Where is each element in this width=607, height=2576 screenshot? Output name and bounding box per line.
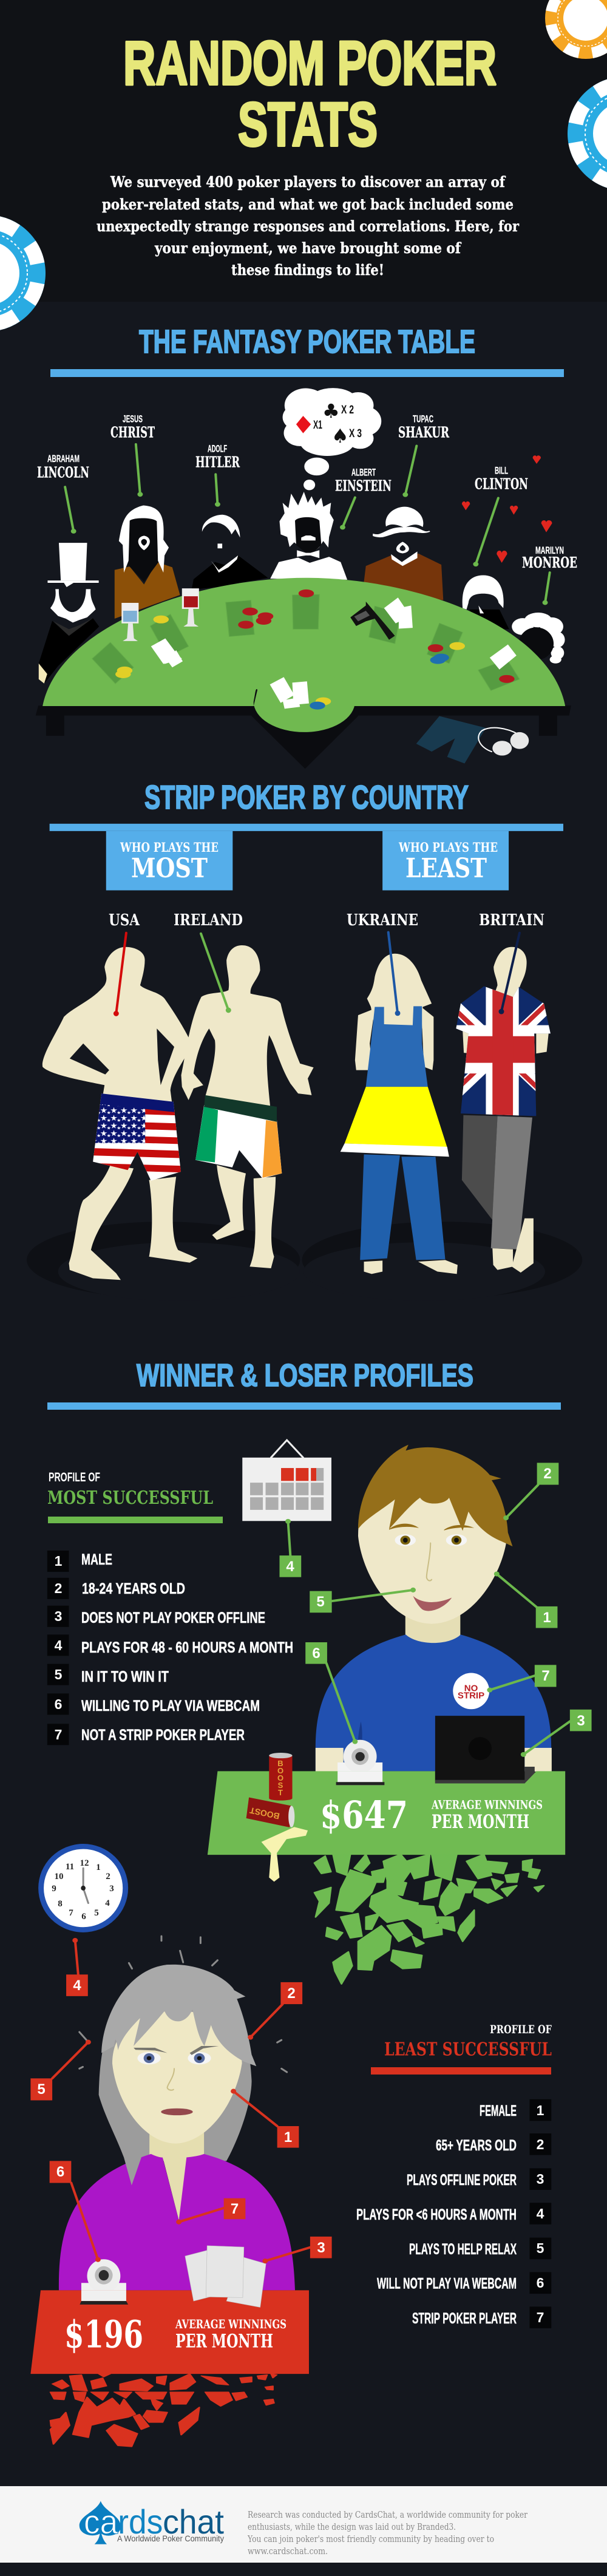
country labels: USA xyxy=(109,911,140,929)
can label upright: O xyxy=(277,1766,283,1775)
green callouts: 7 xyxy=(541,1668,550,1684)
badge text: NO xyxy=(464,1683,478,1694)
usa shorts xyxy=(93,1093,181,1180)
winner list: 18-24 YEARS OLD xyxy=(82,1580,185,1597)
title xyxy=(123,29,497,159)
playing cards xyxy=(185,2246,266,2307)
loser list: PLAYS TO HELP RELAX xyxy=(409,2241,517,2258)
name labels xyxy=(37,413,577,571)
bubble counts: X1 xyxy=(313,419,322,432)
boost cans xyxy=(246,1753,294,1827)
discarded shorts and goggles xyxy=(416,716,529,764)
name labels: LINCOLN xyxy=(37,464,89,481)
winner list: 3 xyxy=(55,1608,62,1624)
figure: Monroe xyxy=(512,613,565,664)
woman brows xyxy=(134,2046,219,2055)
bubble counts xyxy=(313,404,362,440)
winnings text xyxy=(320,1793,543,1837)
footer band xyxy=(0,2486,607,2563)
footer text: You can join poker's most friendly community by heading over to xyxy=(247,2534,494,2544)
man hair xyxy=(358,1445,512,1546)
winner list: DOES NOT PLAY POKER OFFLINE xyxy=(81,1609,265,1626)
name labels: CLINTON xyxy=(475,475,528,493)
spilled drink xyxy=(262,1827,308,1881)
loser list: PLAYS OFFLINE POKER xyxy=(407,2172,517,2189)
figure: Ukraine woman xyxy=(341,933,458,1274)
green callouts: 3 xyxy=(577,1713,585,1729)
name labels: JESUS xyxy=(123,413,143,425)
footer text: enthusiasts, while the design was laid out by Branded3. xyxy=(248,2521,456,2532)
name labels: ALBERT xyxy=(351,466,376,478)
figure: Clinton xyxy=(463,575,509,629)
loser list: 65+ YEARS OLD xyxy=(436,2137,517,2154)
winner list: 6 xyxy=(55,1696,62,1712)
red leader line xyxy=(114,933,126,1016)
woman nose and mouth xyxy=(161,2068,193,2115)
loser list: PLAYS FOR <6 HOURS A MONTH xyxy=(356,2206,517,2223)
tab: who plays the most: WHO PLAYS THE xyxy=(120,840,219,855)
icon: orange chip xyxy=(545,0,607,59)
heading bar and tabs xyxy=(50,824,563,890)
leader lines and hearts xyxy=(65,444,552,605)
winner list: MALE xyxy=(81,1551,112,1568)
red callouts: 3 xyxy=(317,2240,325,2256)
loser list: FEMALE xyxy=(480,2102,517,2119)
tab: who plays the most xyxy=(120,840,219,884)
figure: Britain man xyxy=(456,931,551,1273)
thought bubble xyxy=(283,388,381,490)
betting mats xyxy=(92,594,520,690)
man eyes xyxy=(395,1534,467,1546)
intro text xyxy=(97,173,519,279)
green callouts: 6 xyxy=(312,1645,320,1662)
country labels: IRELAND xyxy=(174,911,243,929)
icon: webcam and laptop xyxy=(336,1716,535,1785)
footer text: www.cardschat.com. xyxy=(248,2546,328,2557)
no strip badge xyxy=(453,1673,489,1709)
heading bar xyxy=(50,369,564,377)
bubble counts: X 2 xyxy=(341,404,354,416)
heading: strip poker by country: STRIP POKER BY COUNTRY xyxy=(144,778,469,816)
country labels: UKRAINE xyxy=(347,911,418,929)
red callouts: 1 xyxy=(284,2129,292,2146)
winner list: IN IT TO WIN IT xyxy=(81,1668,169,1685)
falling green money xyxy=(314,1854,544,1984)
figure: Lincoln xyxy=(39,543,99,684)
name labels: MONROE xyxy=(522,554,577,571)
bubble symbols: ♣ xyxy=(322,399,340,423)
icon: wall clock xyxy=(38,1844,128,1932)
icon: blue chip left xyxy=(0,215,46,331)
winnings text xyxy=(64,2312,287,2357)
panel: strip poker by country xyxy=(27,778,582,1301)
profile heading: most successful xyxy=(47,1470,223,1523)
loser list: 3 xyxy=(537,2171,544,2187)
name labels: SHAKUR xyxy=(398,424,450,441)
name labels: HITLER xyxy=(195,453,240,471)
wine glass: water xyxy=(121,603,138,641)
name labels: ADOLF xyxy=(208,443,227,454)
name labels: BILL xyxy=(495,465,508,476)
red callouts: 5 xyxy=(37,2081,46,2098)
icon: wall clock: 6 xyxy=(81,1912,86,1922)
loser list: 7 xyxy=(537,2309,544,2325)
intro text: poker-related stats, and what we got back included some xyxy=(102,195,514,213)
panel: loser profile xyxy=(30,1844,552,2447)
table top xyxy=(42,578,565,732)
can label fallen: BOOST xyxy=(249,1806,280,1821)
profile heading: least successful: LEAST SUCCESSFUL xyxy=(384,2039,552,2061)
table legs and bar xyxy=(36,687,571,769)
ireland shorts xyxy=(195,1095,282,1178)
icon: wall clock: 7 xyxy=(69,1908,73,1918)
falling red money xyxy=(50,2374,277,2447)
bubble counts: X 3 xyxy=(349,427,362,440)
winnings text: PER MONTH xyxy=(432,1811,529,1833)
winner list: 4 xyxy=(55,1637,63,1653)
winnings text: $647 xyxy=(320,1793,408,1837)
profile heading: least successful xyxy=(371,2023,552,2075)
logo: cardschat: A Worldwide Poker Community xyxy=(117,2534,224,2543)
winner list: 2 xyxy=(55,1580,62,1596)
loser list: 2 xyxy=(537,2136,544,2152)
heading: winner and loser profiles: WINNER & LOSER PROFILES xyxy=(137,1358,473,1393)
icon: wall clock: 11 xyxy=(66,1862,74,1872)
winner list: PLAYS FOR 48 - 60 HOURS A MONTH xyxy=(81,1639,293,1656)
icon: wall clock: 5 xyxy=(94,1908,99,1918)
intro text: your enjoyment, we have brought some of xyxy=(154,239,461,257)
winnings text: AVERAGE WINNINGS xyxy=(175,2317,287,2331)
seated figures xyxy=(39,492,565,684)
loser list: 5 xyxy=(537,2240,544,2256)
can label upright: O xyxy=(277,1773,283,1782)
profile heading: most successful: MOST SUCCESSFUL xyxy=(47,1487,213,1509)
red callouts: 4 xyxy=(73,1977,81,1994)
badge text xyxy=(458,1683,484,1701)
can label upright: S xyxy=(278,1781,283,1790)
woman hair xyxy=(101,1965,256,2066)
red callouts xyxy=(30,1938,332,2263)
winner list: 1 xyxy=(55,1553,63,1569)
can label upright: B xyxy=(277,1759,283,1768)
header band xyxy=(0,0,607,302)
red callouts: 6 xyxy=(56,2164,64,2180)
man brows xyxy=(389,1524,474,1531)
figure: Einstein xyxy=(270,492,347,580)
loser list: 6 xyxy=(537,2275,544,2291)
can label upright: T xyxy=(278,1788,283,1797)
winner list: 5 xyxy=(55,1667,63,1682)
green callouts xyxy=(279,1463,592,1757)
loser list: WILL NOT PLAY VIA WEBCAM xyxy=(377,2275,517,2292)
panel: winner profile xyxy=(47,1358,592,1984)
winner list xyxy=(47,1551,293,1745)
figure: USA man xyxy=(42,933,197,1280)
stress marks xyxy=(80,1936,287,2072)
tab: who plays the least xyxy=(398,840,498,884)
chips xyxy=(115,590,515,710)
icon: calendar xyxy=(242,1440,331,1521)
name labels: ABRAHAM xyxy=(47,453,80,464)
logo: cardschat: cardschat xyxy=(84,2503,224,2541)
icon: wall clock: 3 xyxy=(109,1884,114,1894)
name labels: TUPAC xyxy=(413,413,433,425)
loser list: 1 xyxy=(537,2102,544,2118)
man nose and mouth xyxy=(413,1543,452,1611)
cards xyxy=(151,597,517,709)
red callouts: 7 xyxy=(231,2201,239,2217)
woman eyes xyxy=(137,2052,211,2064)
green callouts: 5 xyxy=(316,1594,325,1610)
intro text: these findings to life! xyxy=(231,261,384,279)
icon: wall clock: 9 xyxy=(52,1884,56,1894)
tab: who plays the least: WHO PLAYS THE xyxy=(398,840,498,855)
panel: fantasy poker table xyxy=(36,324,577,769)
heading: fantasy poker table: THE FANTASY POKER TABLE xyxy=(139,324,475,360)
figure: winner man xyxy=(316,1445,552,1772)
heading bar xyxy=(47,1402,561,1410)
figure: Christ xyxy=(115,506,180,619)
winnings text: PER MONTH xyxy=(175,2330,273,2352)
green desk xyxy=(208,1753,565,1881)
icon: wall clock: 10 xyxy=(55,1872,63,1881)
loser list xyxy=(356,2099,551,2328)
figure: Hitler xyxy=(192,515,268,590)
figure: loser woman xyxy=(59,1965,295,2301)
webcam broken xyxy=(81,2259,126,2301)
blue leader line xyxy=(388,933,400,1016)
intro text: unexpectedly strange responses and correlations. Here, for xyxy=(97,217,519,235)
profile heading: most successful: PROFILE OF xyxy=(49,1470,100,1484)
icon: wall clock: 2 xyxy=(106,1872,110,1881)
bubble symbols: ♠ xyxy=(331,424,349,447)
green callouts: 1 xyxy=(543,1609,551,1626)
green callouts: 2 xyxy=(543,1466,552,1482)
winnings text: $196 xyxy=(64,2312,143,2357)
loser list: STRIP POKER PLAYER xyxy=(412,2310,517,2327)
green callouts: 4 xyxy=(286,1558,294,1575)
winner list: WILLING TO PLAY VIA WEBCAM xyxy=(81,1698,260,1715)
icon: wall clock: 4 xyxy=(105,1898,110,1908)
icon: wall clock: 1 xyxy=(96,1863,101,1872)
name labels: EINSTEIN xyxy=(335,477,392,494)
winner list: 7 xyxy=(55,1727,62,1742)
loser list: 4 xyxy=(537,2206,544,2221)
country labels: BRITAIN xyxy=(479,911,544,929)
name labels: CHRIST xyxy=(110,424,155,441)
footer text: Research was conducted by CardsChat, a worldwide community for poker xyxy=(248,2509,528,2520)
red desk xyxy=(30,2246,309,2374)
bubble symbols xyxy=(322,399,349,447)
wine glass: red xyxy=(182,588,199,627)
navy leader line xyxy=(498,933,520,1014)
footer text xyxy=(247,2509,528,2557)
country labels xyxy=(109,911,544,929)
winner list: NOT A STRIP POKER PLAYER xyxy=(81,1727,245,1744)
union jack shirt xyxy=(456,986,551,1116)
tab: who plays the least: LEAST xyxy=(405,853,487,884)
red callouts: 2 xyxy=(287,1985,296,2002)
icon: blue chip right xyxy=(568,76,607,191)
icon: wall clock: 12 xyxy=(80,1858,89,1868)
figure: Ireland man xyxy=(181,934,314,1268)
tab: who plays the most: MOST xyxy=(131,853,208,884)
profile heading: least successful: PROFILE OF xyxy=(490,2023,552,2036)
icon: wall clock: 8 xyxy=(58,1899,63,1909)
ground shadows xyxy=(27,1222,582,1301)
badge text: STRIP xyxy=(458,1690,484,1701)
icon: pistol xyxy=(350,602,395,640)
title: STATS xyxy=(238,90,378,159)
intro text: We surveyed 400 poker players to discover an array of xyxy=(110,173,506,191)
figure: Shakur xyxy=(364,507,443,600)
winnings text: AVERAGE WINNINGS xyxy=(431,1797,543,1812)
green leader line xyxy=(201,934,231,1013)
can label upright xyxy=(277,1759,283,1797)
name labels: MARILYN xyxy=(535,545,564,556)
